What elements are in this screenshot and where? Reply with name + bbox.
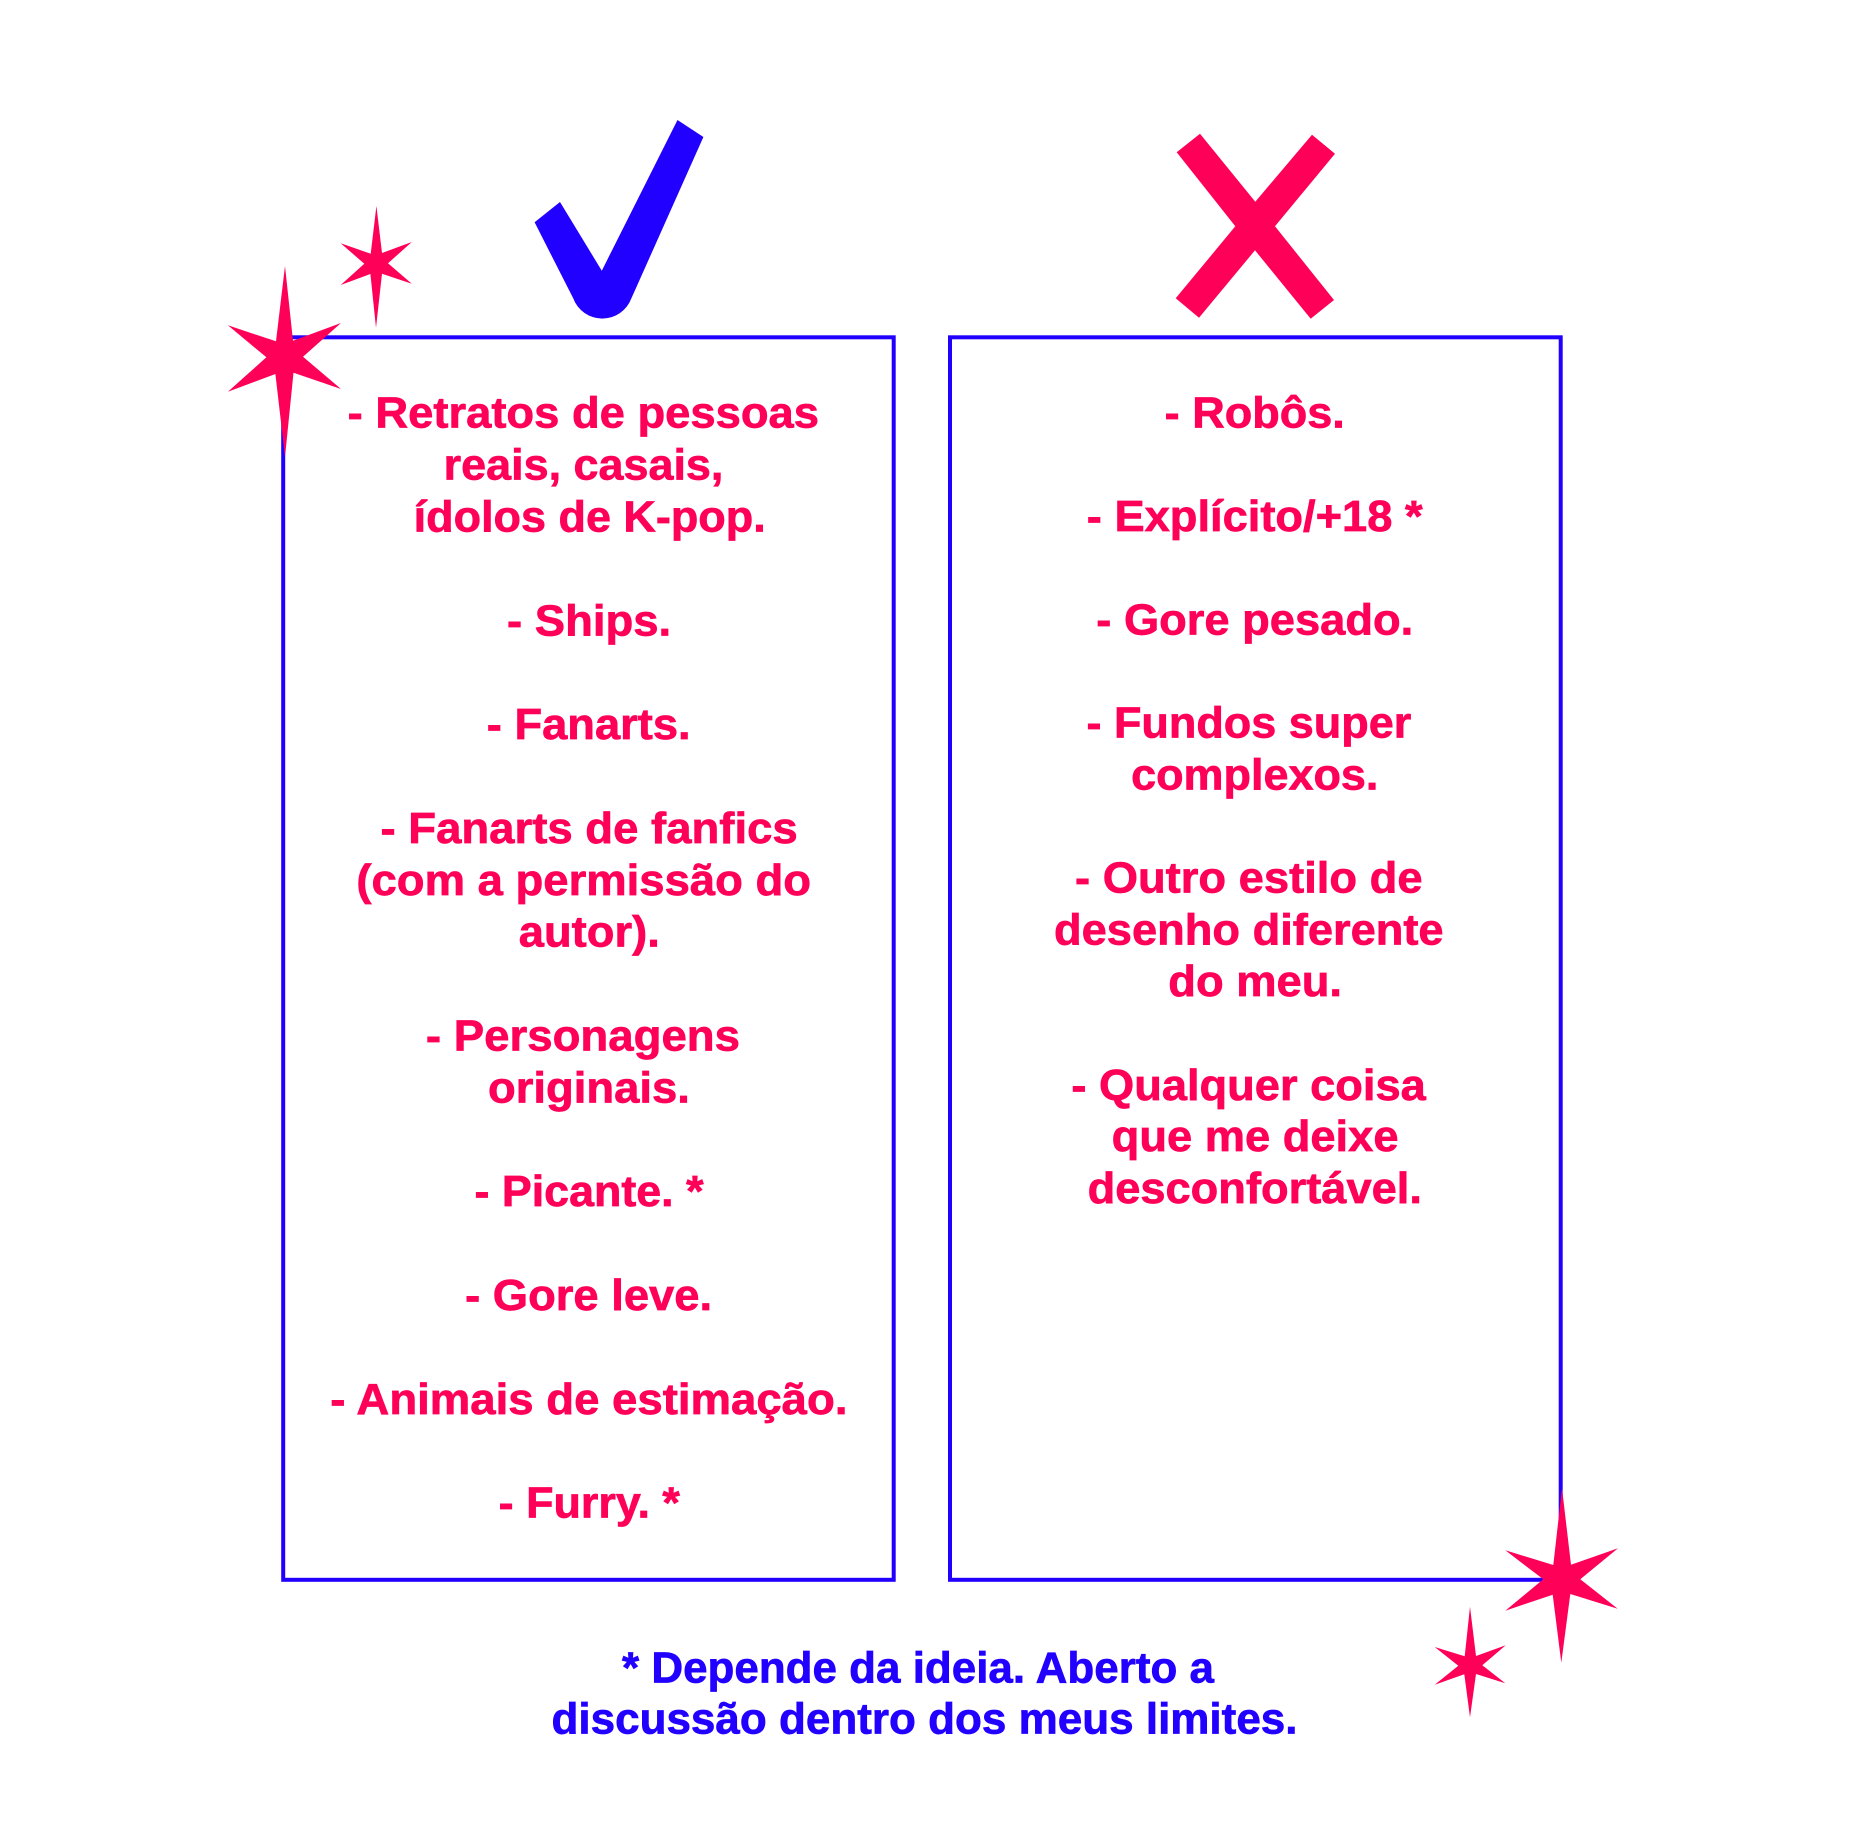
list item: original characters: originais.	[488, 1063, 690, 1112]
list item: portraits: reais, casais,	[444, 441, 723, 490]
list item: other drawing style: do meu.	[1168, 957, 1342, 1006]
list item: anything uncomfortable	[1071, 1061, 1426, 1213]
list item: original characters	[426, 1012, 740, 1112]
list item: portraits: ídolos de K-pop.	[414, 492, 766, 542]
panel border: accepted	[283, 337, 894, 1580]
list item: furry: - Furry. *	[499, 1479, 681, 1528]
panel: rejected list	[950, 337, 1561, 1580]
list item: original characters: - Personagens	[426, 1012, 740, 1060]
list item: pets: - Animais de estimação.	[330, 1375, 848, 1424]
list item: other drawing style: desenho diferente	[1054, 905, 1444, 954]
panel: accepted list	[283, 337, 894, 1580]
list item: fanarts: - Fanarts.	[487, 700, 691, 749]
icon: large sparkle top left	[228, 266, 341, 457]
list item: anything uncomfortable: que me deixe	[1112, 1112, 1398, 1161]
list item: light gore: - Gore leve.	[465, 1271, 712, 1320]
list item: fanfic fanarts	[356, 804, 811, 957]
list item: fanfic fanarts: autor).	[519, 908, 660, 957]
icon: large sparkle bottom right	[1505, 1488, 1618, 1663]
list item: anything uncomfortable: desconfortável.	[1088, 1164, 1422, 1213]
list item: explicit: - Explícito/+18 *	[1087, 492, 1423, 541]
footnote: * Depende da ideia. Aberto a	[622, 1644, 1215, 1693]
icon: pink cross	[1176, 134, 1335, 319]
list item: other drawing style	[1054, 854, 1444, 1006]
list item: spicy: - Picante. *	[474, 1167, 704, 1216]
panel border: rejected	[950, 337, 1561, 1580]
list item: portraits: - Retratos de pessoas	[348, 389, 819, 438]
list item: portraits	[348, 389, 819, 542]
list item: complex backgrounds	[1086, 699, 1411, 800]
footnote	[552, 1644, 1298, 1744]
list item: anything uncomfortable: - Qualquer coisa	[1071, 1061, 1426, 1110]
icon: small sparkle top left	[341, 206, 412, 328]
icon: small sparkle bottom right	[1435, 1607, 1506, 1717]
footnote: discussão dentro dos meus limites.	[552, 1695, 1298, 1744]
list item: robots: - Robôs.	[1165, 389, 1345, 438]
list item: ships: - Ships.	[507, 596, 671, 645]
list item: heavy gore: - Gore pesado.	[1096, 595, 1413, 644]
list item: complex backgrounds: complexos.	[1131, 750, 1378, 800]
list item: fanfic fanarts: (com a permissão do	[356, 856, 811, 905]
list item: fanfic fanarts: - Fanarts de fanfics	[380, 804, 798, 853]
list item: other drawing style: - Outro estilo de	[1075, 854, 1423, 903]
list item: complex backgrounds: - Fundos super	[1086, 699, 1411, 748]
icon: blue check mark	[535, 120, 703, 319]
